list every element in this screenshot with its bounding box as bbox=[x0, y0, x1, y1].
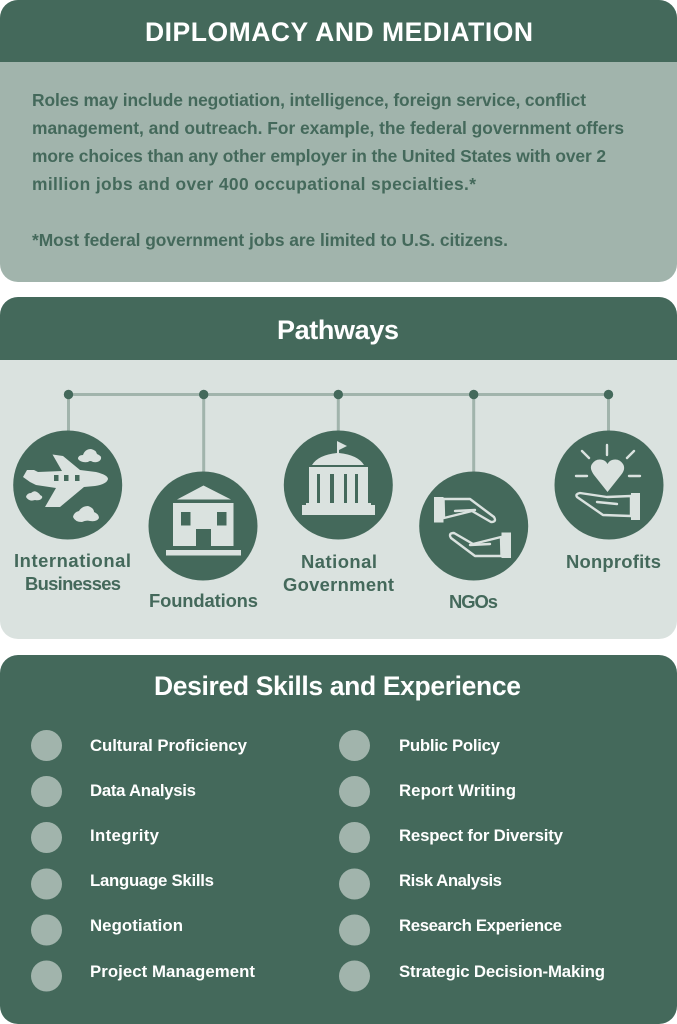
label: national government bbox=[283, 551, 394, 595]
label: nonprofits: Nonprofits bbox=[566, 551, 661, 572]
connector lines bbox=[68, 394, 608, 472]
text block: roles description: more choices than any other employer in the United States with over 2 bbox=[32, 146, 606, 166]
label: foundations: Foundations bbox=[149, 590, 258, 611]
footnote: *Most federal government jobs are limited to U.S. citizens. bbox=[32, 230, 508, 250]
skills list: left column: Language Skills bbox=[90, 871, 214, 890]
title: DIPLOMACY AND MEDIATION bbox=[145, 17, 533, 47]
label: national government: National bbox=[301, 551, 377, 572]
panel: pathways bbox=[0, 297, 677, 639]
text block: roles description: management, and outreach. For example, the federal government offers bbox=[32, 118, 624, 138]
label: ngos: NGOs bbox=[449, 591, 498, 612]
heading: pathways: Pathways bbox=[277, 315, 399, 345]
skills list: right column: Strategic Decision-Making bbox=[399, 962, 605, 981]
skills list: right column: Risk Analysis bbox=[399, 871, 502, 890]
text block: roles description: million jobs and over 400 occupational specialties.* bbox=[32, 174, 476, 194]
icon: airplane bbox=[13, 430, 122, 540]
skills list: right column: Research Experience bbox=[399, 916, 562, 935]
text block: roles description bbox=[32, 90, 624, 194]
skills list: left column: Cultural Proficiency bbox=[90, 736, 248, 755]
connector dots bbox=[64, 390, 613, 399]
skills list: left column: Project Management bbox=[90, 962, 255, 981]
skills list: right column: Respect for Diversity bbox=[399, 826, 564, 845]
icon: hands bbox=[419, 472, 528, 580]
icon: heart in hand bbox=[554, 430, 664, 540]
label: national government: Government bbox=[283, 574, 394, 595]
label: international businesses: International bbox=[14, 550, 131, 571]
panel: diplomacy and mediation bbox=[0, 0, 677, 282]
icon: government capitol bbox=[284, 430, 393, 540]
label: international businesses: Businesses bbox=[25, 573, 121, 594]
icon: foundation building bbox=[148, 472, 258, 580]
skills list: right column: Report Writing bbox=[399, 781, 516, 800]
text block: roles description: Roles may include negotiation, intelligence, foreign service, conflict bbox=[32, 90, 586, 110]
panel: desired skills and experience bbox=[0, 655, 677, 1024]
skills list: left column: Integrity bbox=[90, 826, 160, 845]
skills list: left column: Data Analysis bbox=[90, 781, 196, 800]
skills list: left column bbox=[31, 730, 255, 992]
skills list: right column bbox=[339, 730, 605, 992]
label: international businesses bbox=[14, 550, 131, 594]
heading: desired skills: Desired Skills and Experience bbox=[154, 671, 521, 701]
skills list: right column: Public Policy bbox=[399, 736, 501, 755]
skills list: left column: Negotiation bbox=[90, 916, 183, 935]
